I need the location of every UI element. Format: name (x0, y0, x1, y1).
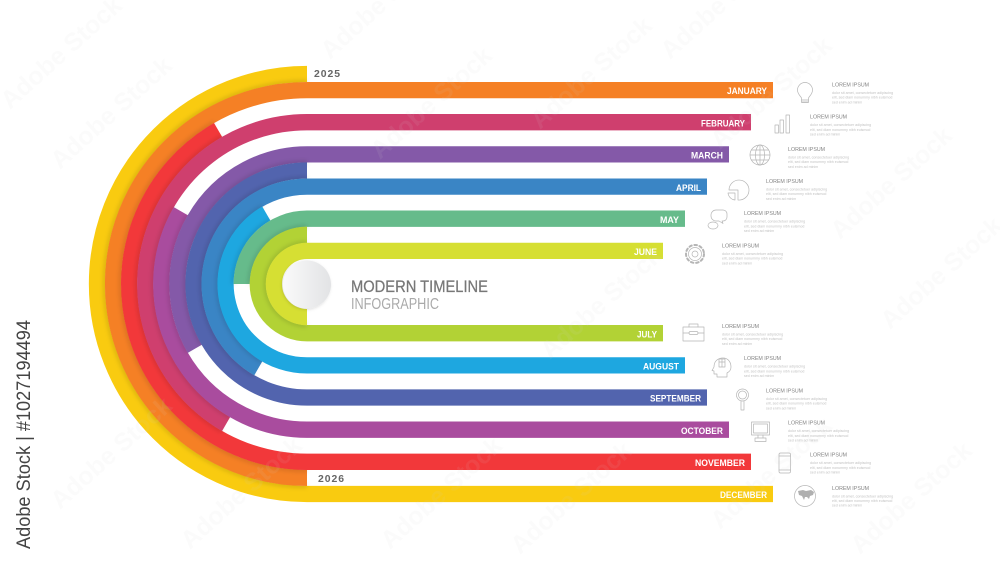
watermark pattern: Adobe Stock (365, 41, 498, 164)
April item: sed enim ad minim (766, 197, 796, 201)
band: yellow / December: DECEMBER (720, 490, 767, 501)
February item (775, 115, 871, 137)
November item: dolor sit amet, consectetuer adipiscing (810, 461, 871, 465)
February item: elit, sed diam nonummy nibh euismod (810, 128, 870, 132)
watermark pattern: Adobe Stock (535, 241, 668, 364)
title (351, 278, 488, 313)
June item: dolor sit amet, consectetuer adipiscing (722, 252, 783, 256)
October item: dolor sit amet, consectetuer adipiscing (788, 429, 849, 433)
icon: globe (750, 145, 770, 165)
March item (750, 145, 849, 169)
October item (752, 421, 849, 442)
April item (728, 179, 827, 201)
June item: sed enim ad minim (722, 261, 752, 265)
March item: elit, sed diam nonummy nibh euismod (788, 160, 848, 164)
March item: dolor sit amet, consectetuer adipiscing (788, 155, 849, 159)
January item: elit, sed diam nonummy nibh euismod (832, 96, 892, 100)
icon: light bulb (798, 83, 812, 102)
icon: speech bubbles (708, 210, 727, 229)
September item: dolor sit amet, consectetuer adipiscing (766, 397, 827, 401)
December item: elit, sed diam nonummy nibh euismod (832, 499, 892, 503)
January item (798, 82, 893, 104)
August item: elit, sed diam nonummy nibh euismod (744, 369, 804, 373)
icon: pie chart (728, 180, 749, 200)
February item: dolor sit amet, consectetuer adipiscing (810, 123, 871, 127)
August item: LOREM IPSUM (744, 356, 781, 362)
watermark pattern: Adobe Stock (375, 431, 508, 554)
May item: LOREM IPSUM (744, 211, 781, 217)
April item: elit, sed diam nonummy nibh euismod (766, 192, 826, 196)
band: indigo / September (194, 170, 707, 405)
November item (779, 453, 871, 475)
band: green / May (242, 215, 685, 284)
February item: sed enim ad minim (810, 133, 840, 137)
band: lime / July: JULY (637, 329, 657, 340)
band: blue / April (210, 183, 707, 368)
icon: smartphone (779, 453, 790, 473)
icon: gear (686, 245, 704, 263)
watermark pattern: Adobe Stock (705, 411, 838, 534)
band: red / November: NOVEMBER (695, 458, 745, 469)
July item: elit, sed diam nonummy nibh euismod (722, 337, 782, 341)
August item (712, 356, 805, 378)
band: orange / January: JANUARY (727, 86, 768, 97)
band: cyan / August: AUGUST (643, 362, 679, 373)
band: violet / March (177, 151, 729, 349)
June item (686, 243, 783, 265)
year label 2026: 2026 (318, 474, 344, 485)
April item: dolor sit amet, consectetuer adipiscing (766, 188, 827, 192)
band: yellow / December (97, 74, 773, 501)
December item (794, 486, 893, 508)
watermark pattern: Adobe Stock (175, 431, 308, 554)
band: magenta / February: FEBRUARY (701, 118, 745, 129)
May item (708, 210, 805, 233)
icon: briefcase (683, 324, 704, 341)
year label 2025: 2025 (314, 69, 340, 80)
band: lime / July (258, 235, 663, 340)
January item: dolor sit amet, consectetuer adipiscing (832, 91, 893, 95)
May item: sed enim ad minim (744, 229, 774, 233)
watermark pattern: Adobe Stock (525, 11, 658, 134)
band: yellow-green / June (274, 247, 663, 317)
March item: LOREM IPSUM (788, 147, 825, 153)
November item: LOREM IPSUM (810, 453, 847, 459)
June item: elit, sed diam nonummy nibh euismod (722, 257, 782, 261)
vertical stock credit: Adobe Stock | #1027194494 (14, 320, 35, 549)
August item: dolor sit amet, consectetuer adipiscing (744, 365, 805, 369)
title: MODERN TIMELINE (351, 278, 488, 296)
title: INFOGRAPHIC (351, 296, 439, 313)
band: blue / April: APRIL (676, 183, 701, 194)
July item (683, 324, 783, 346)
November item: sed enim ad minim (810, 471, 840, 475)
September item (736, 388, 827, 410)
September item: sed enim ad minim (766, 406, 796, 410)
September item: elit, sed diam nonummy nibh euismod (766, 402, 826, 406)
band: green / May: MAY (660, 215, 680, 226)
December item: dolor sit amet, consectetuer adipiscing (832, 494, 893, 498)
band: cyan / August (226, 214, 685, 373)
rainbow timeline bands (97, 74, 773, 501)
February item: LOREM IPSUM (810, 115, 847, 121)
October item: LOREM IPSUM (788, 421, 825, 427)
watermark pattern: Adobe Stock (505, 436, 638, 559)
July item: dolor sit amet, consectetuer adipiscing (722, 332, 783, 336)
July item: LOREM IPSUM (722, 324, 759, 330)
July item: sed enim ad minim (722, 342, 752, 346)
band: yellow-green / June: JUNE (634, 247, 658, 258)
watermark pattern: Adobe Stock (845, 436, 978, 559)
May item: dolor sit amet, consectetuer adipiscing (744, 220, 805, 224)
watermark pattern: Adobe Stock (45, 391, 178, 514)
October item: sed enim ad minim (788, 438, 818, 442)
band: indigo / September: SEPTEMBER (650, 394, 701, 405)
icon: head with chart (712, 358, 731, 377)
band: magenta / February (145, 118, 751, 424)
watermark pattern: Adobe Stock (45, 51, 178, 174)
January item: sed enim ad minim (832, 100, 862, 104)
October item: elit, sed diam nonummy nibh euismod (788, 434, 848, 438)
band: purple / October (161, 211, 729, 437)
center circle (283, 260, 331, 308)
icon: magnifying glass (736, 389, 748, 410)
November item: elit, sed diam nonummy nibh euismod (810, 466, 870, 470)
icon: world map (794, 486, 816, 506)
December item: sed enim ad minim (832, 504, 862, 508)
June item: LOREM IPSUM (722, 243, 759, 249)
January item: LOREM IPSUM (832, 82, 869, 88)
August item: sed enim ad minim (744, 374, 774, 378)
December item: LOREM IPSUM (832, 486, 869, 492)
icon: computer monitor (752, 422, 770, 442)
April item: LOREM IPSUM (766, 179, 803, 185)
September item: LOREM IPSUM (766, 388, 803, 394)
icon: bar chart (775, 115, 790, 133)
watermark pattern: Adobe Stock (705, 31, 838, 154)
May item: elit, sed diam nonummy nibh euismod (744, 224, 804, 228)
watermark pattern: Adobe Stock (825, 121, 958, 244)
March item: sed enim ad minim (788, 165, 818, 169)
band: violet / March: MARCH (691, 151, 723, 162)
band: purple / October: OCTOBER (681, 426, 723, 437)
band: red / November (129, 130, 751, 469)
band: orange / January (113, 86, 773, 478)
